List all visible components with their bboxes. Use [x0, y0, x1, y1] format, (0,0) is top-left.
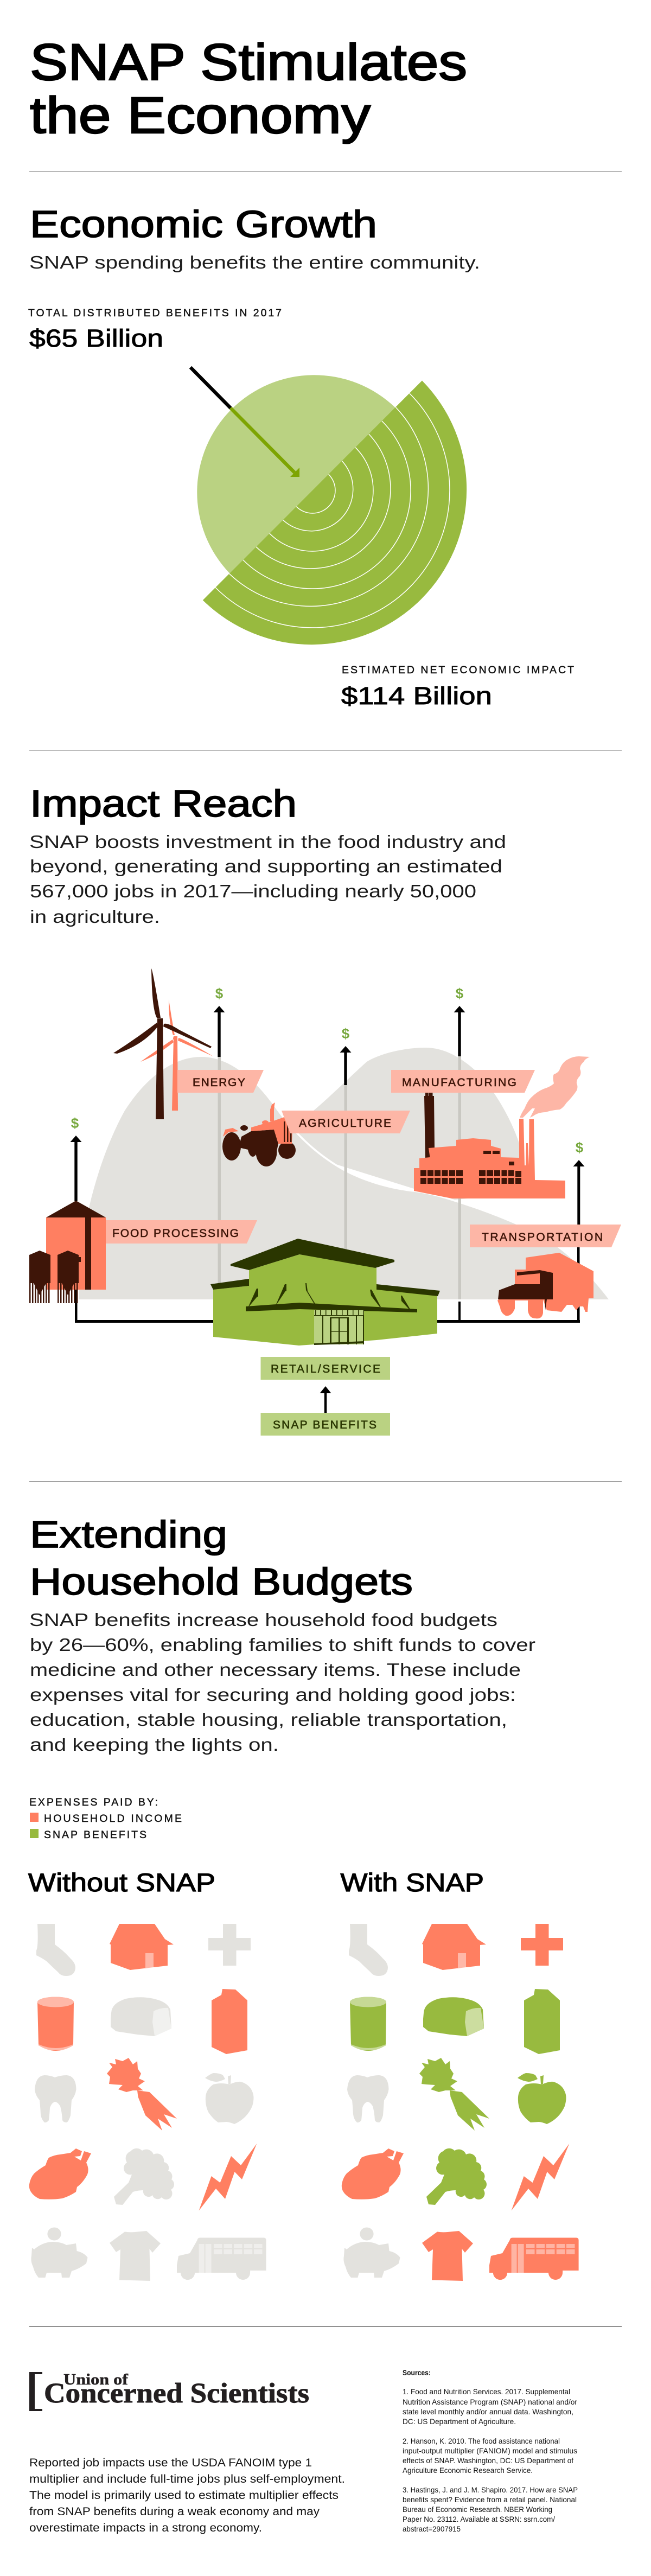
arrow and dollar: food processing	[71, 1115, 81, 1201]
semicircle: net economic impact rings	[203, 381, 467, 645]
text: household budgets paragraph	[29, 1610, 535, 1755]
icon: broccoli	[114, 2148, 174, 2205]
arrow and dollar: agriculture: $	[342, 1025, 350, 1042]
legend: expenses paid by	[29, 1796, 182, 1841]
text: sources: 3. Hastings, J. and J. M. Shapiro. 2017. How are SNAP	[403, 2485, 578, 2494]
text: methodology note: multiplier and include full-time jobs plus self-employment.	[29, 2473, 345, 2485]
icon: factory	[414, 1056, 590, 1198]
heading: With SNAP: With SNAP	[341, 1868, 484, 1897]
icon: piggy bank	[31, 2228, 87, 2278]
icon: piggy bank	[343, 2228, 400, 2278]
icon: sock	[349, 1924, 388, 1976]
diagram: SNAP spending flow through the economy	[29, 968, 621, 1436]
icon: apple	[205, 2073, 254, 2124]
icon: medical cross	[208, 1924, 251, 1966]
callout: estimated net economic impact	[341, 664, 574, 710]
text: Impact Reach paragraph: beyond, generating and supporting an estimated	[30, 856, 502, 876]
text: sources: Agriculture Economic Research Service.	[403, 2466, 533, 2475]
title	[30, 34, 467, 144]
arrow and dollar: transportation: $	[576, 1139, 584, 1156]
chart: benefits versus economic impact semicircles	[190, 367, 467, 645]
text: sources: abstract=2907915	[403, 2524, 461, 2533]
arrow: benefits into the economy	[190, 367, 299, 477]
text: sources: 2. Hanson, K. 2010. The food assistance national	[403, 2437, 560, 2445]
icon: tractor	[222, 1102, 296, 1166]
legend: expenses paid by: SNAP BENEFITS	[44, 1829, 146, 1841]
label: energy	[177, 1070, 264, 1093]
icon: milk carton	[212, 1989, 247, 2054]
arrow and dollar: transportation	[573, 1139, 585, 1225]
semicircle: distributed benefits	[197, 375, 395, 573]
label: energy: ENERGY	[193, 1076, 245, 1089]
callout: total distributed benefits	[28, 307, 282, 352]
icon: house	[110, 1924, 174, 1970]
callout: total distributed benefits: TOTAL DISTRIBUTED BENEFITS IN 2017	[28, 307, 282, 319]
icon: school bus	[177, 2237, 266, 2280]
icon: carrots	[107, 2058, 177, 2131]
callout: estimated net economic impact: $114 Billion	[341, 682, 492, 710]
heading: Economic Growth: Economic Growth	[30, 203, 377, 245]
text: Impact Reach paragraph: 567,000 jobs in 2017—including nearly 50,000	[30, 881, 476, 901]
legend: expenses paid by: EXPENSES PAID BY:	[29, 1796, 158, 1808]
title: the Economy	[30, 87, 371, 144]
text: Impact Reach paragraph	[29, 832, 506, 927]
callout: total distributed benefits: $65 Billion	[29, 324, 163, 352]
text: sources: input-output multiplier (FANIOM) model and stimulus	[403, 2446, 577, 2455]
text: sources	[403, 2368, 578, 2533]
text: household budgets paragraph: and keeping the lights on.	[30, 1735, 279, 1755]
arrow: SNAP benefits to retail	[320, 1386, 331, 1413]
text: sources: Nutrition Assistance Program (SNAP) national and/or	[403, 2398, 577, 2406]
heading: Impact Reach: Impact Reach	[30, 782, 297, 825]
icon: bread	[111, 1997, 171, 2036]
icon: can	[350, 1997, 386, 2051]
label: manufacturing	[391, 1070, 535, 1093]
text: Impact Reach paragraph: SNAP boosts investment in the food industry and	[29, 832, 506, 852]
icon: retail store	[210, 1239, 440, 1346]
icon: tooth	[347, 2075, 388, 2122]
connector lines beneath the sectors	[75, 1247, 580, 1323]
text: methodology note: The model is primarily used to estimate multiplier effects	[29, 2489, 339, 2502]
panel: expenses without SNAP	[29, 1924, 266, 2281]
title: SNAP Stimulates	[30, 34, 467, 91]
heading: Extending Household Budgets	[30, 1513, 413, 1603]
arrow and dollar: food processing: $	[71, 1115, 79, 1131]
icon: apple	[518, 2073, 566, 2124]
text: methodology note: Reported job impacts use the USDA FANOIM type 1	[29, 2457, 312, 2469]
arrow and dollar: agriculture	[340, 1025, 352, 1085]
arrow and dollar: energy: $	[215, 985, 224, 1002]
icon: house	[422, 1924, 486, 1970]
icon: food processing plant	[29, 1201, 106, 1303]
arrow and dollar: energy	[214, 985, 225, 1057]
text: household budgets paragraph: medicine and other necessary items. These include	[30, 1660, 521, 1680]
label: agriculture	[282, 1111, 410, 1133]
label: food processing	[106, 1220, 257, 1244]
box: SNAP benefits	[260, 1413, 390, 1436]
text: household budgets paragraph: SNAP benefits increase household food budgets	[29, 1610, 497, 1630]
logo: Union of Concerned Scientists: Concerned Scientists	[44, 2378, 309, 2409]
storefront	[314, 1310, 364, 1345]
arrow and dollar: manufacturing: $	[456, 985, 464, 1002]
icon: milk carton	[524, 1989, 560, 2054]
icon: lightning bolt	[199, 2144, 257, 2210]
heading: Extending Household Budgets: Extending	[30, 1513, 227, 1555]
text: methodology note: overestimate impacts in a strong economy.	[29, 2522, 262, 2534]
icon: can	[37, 1997, 74, 2051]
icon: wind turbines	[113, 968, 213, 1119]
hills background	[79, 1048, 609, 1299]
text: sources: 1. Food and Nutrition Services. 2017. Supplemental	[403, 2387, 570, 2396]
icon: broccoli	[426, 2148, 487, 2205]
silos	[29, 1251, 81, 1303]
text: Impact Reach paragraph: in agriculture.	[30, 907, 160, 927]
icon: t-shirt	[422, 2231, 473, 2281]
label: transportation: TRANSPORTATION	[482, 1231, 603, 1244]
text: sources: Sources:	[403, 2368, 431, 2377]
callout: estimated net economic impact: ESTIMATED NET ECONOMIC IMPACT	[342, 664, 574, 676]
icon: lightning bolt	[512, 2144, 569, 2210]
box: retail/service: RETAIL/SERVICE	[271, 1363, 380, 1375]
icon: carrots	[419, 2058, 489, 2131]
icon: truck	[497, 1253, 593, 1318]
icon: chicken	[29, 2148, 91, 2199]
logo: Union of Concerned Scientists	[29, 2371, 309, 2411]
label: manufacturing: MANUFACTURING	[402, 1076, 516, 1089]
logo: Union of Concerned Scientists: Union of	[63, 2371, 128, 2388]
text: household budgets paragraph: expenses vital for securing and holding good jobs:	[30, 1685, 516, 1705]
legend: expenses paid by: HOUSEHOLD INCOME	[44, 1813, 182, 1825]
box: retail/service	[260, 1357, 390, 1380]
heading: Without SNAP: Without SNAP	[28, 1868, 215, 1897]
box: SNAP benefits: SNAP BENEFITS	[273, 1419, 376, 1431]
text: household budgets paragraph: education, stable housing, reliable transportation,	[30, 1710, 507, 1730]
label: transportation	[470, 1225, 621, 1247]
text: sources: state level monthly and/or annual data. Washington,	[403, 2407, 573, 2416]
text: sources: Bureau of Economic Research. NBER Working	[403, 2505, 552, 2514]
icon: school bus	[489, 2237, 579, 2280]
text: methodology note: from SNAP benefits during a weak economy and may	[29, 2505, 320, 2518]
icon: tooth	[35, 2075, 76, 2122]
label: agriculture: AGRICULTURE	[299, 1117, 391, 1130]
text: sources: DC: US Department of Agriculture.	[403, 2417, 516, 2426]
icon: sock	[36, 1924, 75, 1976]
icon: t-shirt	[110, 2231, 161, 2281]
label: food processing: FOOD PROCESSING	[112, 1227, 239, 1240]
text: sources: Paper No. 23112. Available at SSRN: ssrn.com/	[403, 2515, 555, 2523]
smoke	[520, 1056, 590, 1118]
icon: chicken	[342, 2148, 404, 2199]
text: sources: effects of SNAP. Washington, DC: US Department of	[403, 2456, 573, 2465]
panel: expenses with SNAP	[342, 1924, 579, 2281]
heading: Extending Household Budgets: Household Budgets	[30, 1560, 413, 1603]
text: Economic Growth intro: SNAP spending benefits the entire community.	[29, 252, 480, 272]
icon: bread	[423, 1997, 484, 2036]
arrow and dollar: manufacturing	[454, 985, 465, 1056]
icon: medical cross	[521, 1924, 563, 1966]
text: household budgets paragraph: by 26—60%, enabling families to shift funds to cover	[30, 1635, 535, 1655]
text: methodology note	[29, 2457, 345, 2534]
text: sources: benefits spent? Evidence from a retail panel. National	[403, 2495, 577, 2504]
